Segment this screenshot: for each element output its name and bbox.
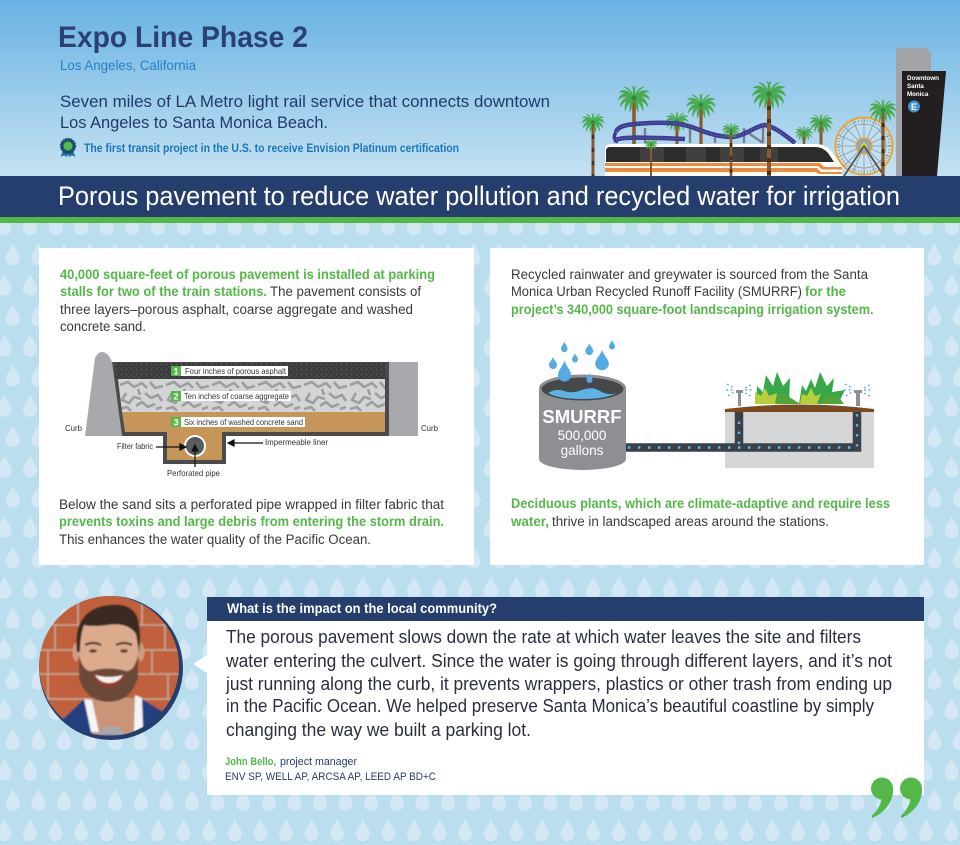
speech pointer bbox=[193, 655, 207, 673]
portrait: John Bello bbox=[35, 592, 185, 742]
tank: gallons bbox=[561, 443, 604, 458]
quote text: water entering the culvert. Since the water is going through different layers, and it’s not bbox=[225, 651, 892, 671]
closing text: prevents toxins and large debris from entering the storm drain. bbox=[59, 514, 444, 529]
icon: closing quotation marks bbox=[871, 778, 922, 818]
intro text: . bbox=[870, 302, 874, 317]
panel: porous pavement bbox=[39, 248, 474, 565]
layer labels: Impermeable liner bbox=[265, 437, 328, 447]
panel: recycled water bbox=[490, 248, 924, 565]
downtown santa monica tower: Monica bbox=[907, 91, 929, 98]
layer labels: 3 bbox=[173, 418, 179, 428]
layer labels: Curb bbox=[65, 423, 82, 433]
closing text bbox=[510, 496, 890, 529]
downtown santa monica tower: E bbox=[911, 102, 917, 112]
banner bbox=[0, 176, 960, 223]
attribution: ENV SP, WELL AP, ARCSA AP, LEED AP BD+C bbox=[225, 771, 436, 783]
attribution: John Bello, bbox=[225, 756, 276, 768]
project description bbox=[60, 92, 550, 132]
layer labels: 1 bbox=[173, 366, 179, 378]
background drop pattern bbox=[0, 222, 960, 845]
intro text: for the bbox=[805, 284, 846, 299]
attribution: project manager bbox=[280, 756, 357, 768]
roller coaster bbox=[614, 123, 795, 143]
layer labels: Ten inches of coarse aggregate bbox=[184, 391, 289, 401]
sprinklers bbox=[726, 384, 872, 406]
quote text bbox=[225, 627, 892, 740]
water drops bbox=[549, 340, 615, 383]
tank bbox=[539, 374, 626, 470]
quote text: in the Pacific Ocean. We helped preserve Santa Monica’s beautiful coastline by simply bbox=[226, 696, 874, 716]
intro text: stalls for two of the train stations. bbox=[60, 284, 267, 299]
irrigation bed bbox=[725, 404, 874, 468]
tank: SMURRF bbox=[542, 406, 622, 427]
closing text bbox=[59, 497, 444, 547]
closing text: This enhances the water quality of the Pacific Ocean. bbox=[59, 532, 371, 547]
downtown santa monica tower bbox=[896, 48, 946, 176]
SMURRF tank diagram bbox=[539, 340, 874, 470]
intro text: Monica Urban Recycled Runoff Facility (SMURRF) bbox=[511, 284, 802, 299]
intro text bbox=[60, 267, 435, 334]
plants bbox=[755, 372, 845, 404]
layer labels: Perforated pipe bbox=[167, 468, 220, 478]
certification note: The first transit project in the U.S. to receive Envision Platinum certification bbox=[84, 143, 459, 155]
layer labels: Four inches of porous asphalt bbox=[185, 366, 287, 376]
closing text: Below the sand sits a perforated pipe wrapped in filter fabric that bbox=[59, 497, 444, 512]
layer labels: 2 bbox=[173, 392, 179, 402]
tank: 500,000 bbox=[558, 428, 606, 443]
layer labels: Curb bbox=[421, 423, 438, 433]
palms in front of train bbox=[581, 81, 786, 176]
banner: Porous pavement to reduce water pollution and recycled water for irrigation bbox=[58, 181, 900, 211]
intro text: project’s 340,000 square-foot landscaping irrigation system bbox=[511, 302, 870, 317]
attribution bbox=[225, 756, 436, 783]
ferris wheel bbox=[836, 118, 892, 176]
pipe bbox=[626, 412, 857, 448]
panel: community impact quote bbox=[193, 597, 924, 795]
closing text: thrive in landscaped areas around the stations. bbox=[552, 514, 829, 529]
project description: Seven miles of LA Metro light rail service that connects downtown bbox=[60, 92, 550, 111]
closing text: Deciduous plants, which are climate-adaptive and require less bbox=[511, 496, 890, 511]
palm right of wheel bbox=[869, 100, 897, 176]
intro text: 40,000 square-feet of porous pavement is installed at parking bbox=[60, 267, 435, 282]
quote text: changing the way we built a parking lot. bbox=[226, 720, 531, 740]
project description: Los Angeles to Santa Monica Beach. bbox=[60, 113, 328, 132]
icon: certification rosette bbox=[60, 138, 76, 157]
pavement cross-section diagram bbox=[65, 352, 438, 478]
location: Los Angeles, California bbox=[60, 57, 196, 73]
intro text: The pavement consists of bbox=[270, 284, 421, 299]
callout arrows bbox=[156, 440, 263, 467]
intro text bbox=[511, 267, 874, 317]
train bbox=[605, 144, 842, 176]
intro text: three layers–porous asphalt, coarse aggregate and washed bbox=[60, 302, 413, 317]
downtown santa monica tower: Downtown bbox=[907, 75, 939, 82]
intro text: Recycled rainwater and greywater is sourced from the Santa bbox=[511, 267, 868, 282]
layer labels bbox=[65, 366, 438, 478]
downtown santa monica tower: Santa bbox=[907, 83, 924, 90]
quote text: just running along the curb, it prevents wrappers, plastics or other trash from ending up bbox=[225, 674, 892, 694]
quote heading bbox=[207, 597, 924, 621]
palms behind train bbox=[618, 86, 833, 146]
header sky bbox=[0, 0, 960, 177]
illustration: Santa Monica skyline bbox=[581, 48, 946, 176]
closing text: water, bbox=[510, 514, 549, 529]
layer labels: Six inches of washed concrete sand bbox=[184, 417, 303, 427]
title: Expo Line Phase 2 bbox=[58, 21, 308, 54]
quote text: The porous pavement slows down the rate at which water leaves the site and filters bbox=[226, 627, 861, 647]
intro text: concrete sand. bbox=[60, 319, 146, 334]
quote heading: What is the impact on the local community? bbox=[227, 601, 497, 616]
layer labels: Filter fabric bbox=[117, 441, 154, 451]
